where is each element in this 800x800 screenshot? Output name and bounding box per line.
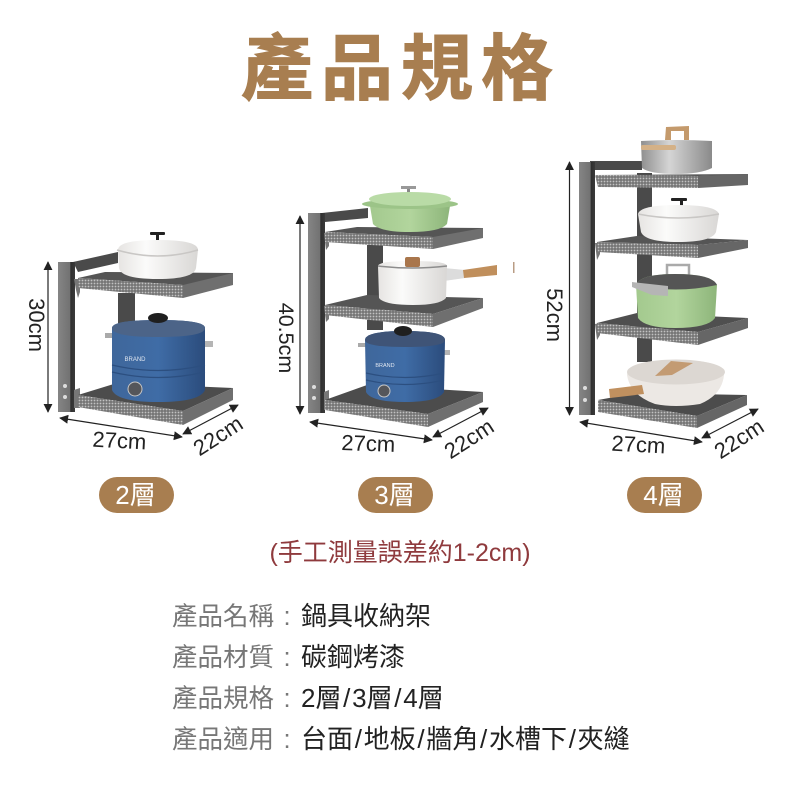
spec row: material: : [284,644,291,672]
title: 產品規格 [241,30,561,110]
width label: 27cm: 27cm [611,431,666,458]
icon: green pot [362,186,458,232]
width label: 27cm: 27cm [92,427,147,454]
width label: 27cm: 27cm [341,430,396,457]
spec row: sizes: 產品規格 [172,685,274,713]
product: 3-tier rack [274,186,514,464]
depth label: 22cm: 22cm [440,414,498,464]
icon: blue pot [358,326,450,402]
icon: white frying pan [609,360,725,406]
dimension arrows: 4-tier [570,162,758,442]
icon: white saucepan [378,257,497,305]
badge: 3 tiers [358,477,433,513]
icon: blue pot [105,313,213,402]
product: 4-tier rack [542,126,768,464]
rack frame: 4-tier [579,161,748,428]
rack frame: 3-tier [308,208,483,427]
spec row: name: : [284,603,291,631]
spec row: usage: 產品適用 [172,726,274,754]
icon: white pot [117,232,198,279]
spec row: usage: : [284,726,291,754]
spec row: material [172,642,405,672]
badge: 4 tiers [627,477,702,513]
badge: 3 tiers: 3層 [374,480,415,510]
product: 2-tier rack [24,232,247,461]
depth label: 22cm: 22cm [710,414,768,464]
spec row: sizes: 2層/3層/4層 [301,683,444,713]
dimension arrows: 3-tier [300,216,488,440]
badge: 2 tiers [99,477,174,513]
badge: 2 tiers: 2層 [115,480,156,510]
icon: green pot [632,265,717,328]
badge: 4 tiers: 4層 [643,480,684,510]
icon: steel pot [641,126,712,174]
rack frame: 2-tier [58,252,233,425]
spec row: material: 碳鋼烤漆 [301,642,405,672]
measurement note: (手工測量誤差約1-2cm) [269,539,531,567]
spec row: sizes [172,683,444,713]
height label: 52cm: 52cm [542,288,567,342]
icon: white pot [638,198,719,242]
icon: blue pot: BRAND [124,357,146,363]
spec row: name [172,601,431,631]
depth label: 22cm: 22cm [189,411,247,461]
spec row: name: 鍋具收納架 [301,601,431,631]
dimension arrows: 2-tier [48,262,238,437]
height label: 30cm: 30cm [24,298,49,352]
spec row: sizes: : [284,685,291,713]
icon: blue pot: BRAND [375,363,395,369]
spec row: usage: 台面/地板/牆角/水槽下/夾縫 [301,724,630,754]
spec row: material: 產品材質 [172,644,274,672]
photo fragment [513,262,514,273]
height label: 40.5cm: 40.5cm [274,303,298,373]
specification list [172,601,630,754]
spec row: name: 產品名稱 [172,603,274,631]
